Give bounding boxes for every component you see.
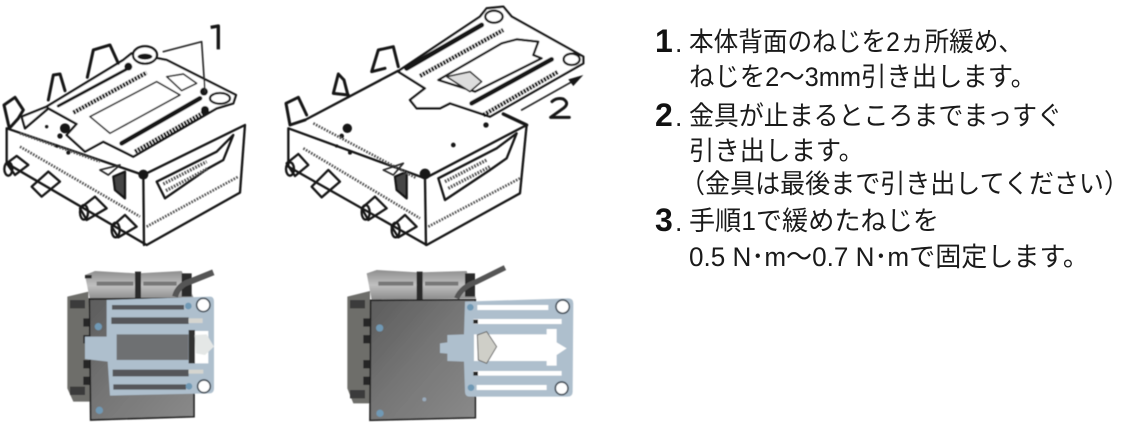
device body xyxy=(7,125,245,245)
mounting bracket xyxy=(4,45,236,157)
step 1: . xyxy=(675,28,682,58)
metal back panel xyxy=(370,300,475,420)
blue bracket xyxy=(440,298,573,397)
step 2: 2 xyxy=(655,97,673,133)
step 3: 手順1で緩めたねじを xyxy=(689,206,939,236)
left connector xyxy=(347,291,371,403)
photo: rear of device, bracket pulled out xyxy=(347,268,573,420)
silver top housing and cable xyxy=(367,268,505,300)
step 2: 引き出します。 xyxy=(689,136,864,166)
step 2: 金具が止まるところまでまっすぐ xyxy=(689,101,1062,131)
arrow and number 2 xyxy=(522,75,583,117)
step 1: ねじを2～3mm引き出します。 xyxy=(689,62,1036,92)
connectors xyxy=(4,156,137,237)
metal back panel xyxy=(89,298,194,420)
step 3: . xyxy=(675,207,682,237)
step 1 xyxy=(655,23,1036,92)
diagram: step 1, bracket retracted, screws loosened xyxy=(4,26,245,245)
instructions text xyxy=(655,23,1129,272)
step 3: 3 xyxy=(655,202,673,238)
device body xyxy=(288,114,527,245)
step 2 xyxy=(655,97,1129,199)
screws xyxy=(95,303,192,414)
step 3: 0.5 N･m～0.7 N･mで固定します。 xyxy=(689,242,1089,272)
step 2: . xyxy=(675,102,682,132)
silver top housing and cable xyxy=(85,271,213,300)
left connector xyxy=(67,292,90,402)
blue bracket xyxy=(85,297,214,396)
diagram: step 2, bracket pulled out xyxy=(286,7,583,245)
step 1: 本体背面のねじを2ヵ所緩め、 xyxy=(689,27,1023,57)
photo: rear of device, bracket retracted xyxy=(67,271,214,420)
step 1: 1 xyxy=(655,23,673,59)
callout: number 1 with leader lines xyxy=(163,26,218,92)
connectors xyxy=(286,154,417,237)
extended bracket xyxy=(286,7,583,125)
step 3 xyxy=(655,202,1089,272)
screws xyxy=(376,304,474,417)
